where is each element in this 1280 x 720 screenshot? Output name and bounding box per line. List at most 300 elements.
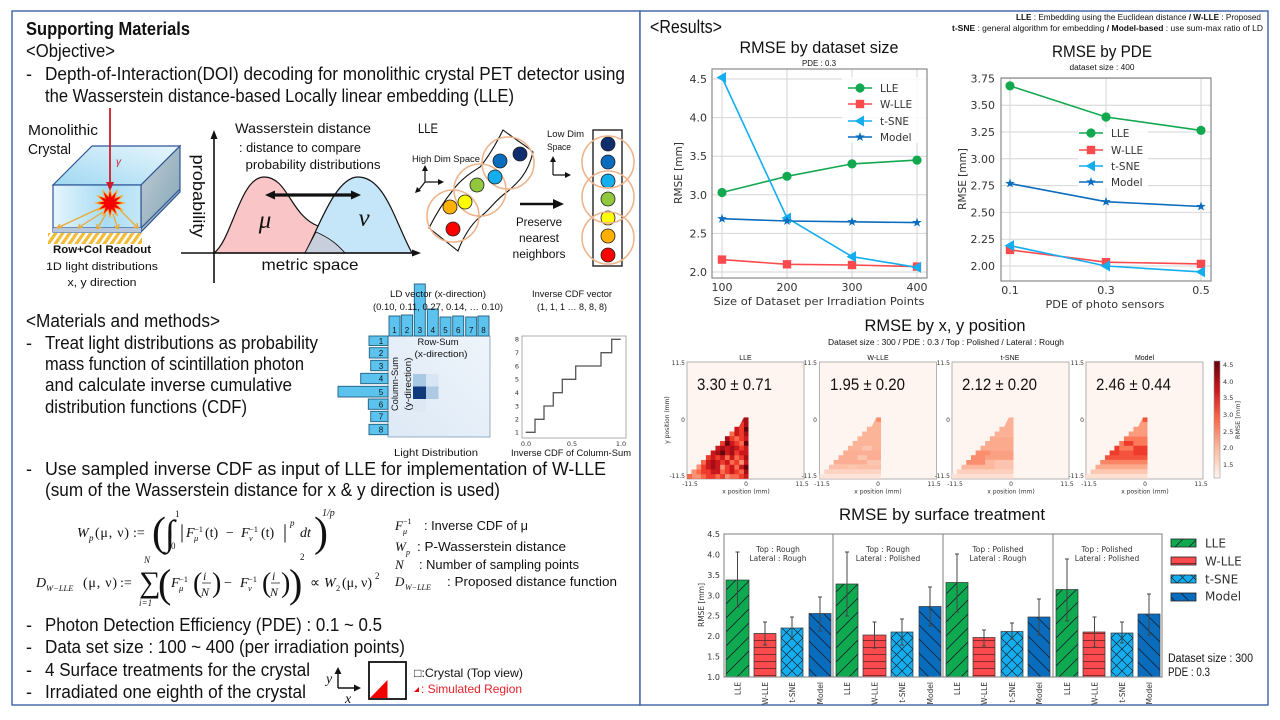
chart: RMSE by PDE: 0.5 (1192, 284, 1210, 297)
diagram: Wasserstein distance: probability distributions (246, 158, 380, 172)
chart: light distribution matrix with row and column sums: 1 (379, 337, 384, 346)
formula: proposed W-LLE distance: − (224, 576, 232, 591)
chart: inverse CDF step plot: 0.5 (567, 440, 577, 448)
chart: RMSE by PDE: 2.25 (970, 233, 995, 246)
text block: sampled inverse CDF (26, 459, 606, 500)
chart: RMSE by surface treatment: W-LLE (870, 682, 880, 705)
text block: formula notation: : Proposed distance function (447, 574, 617, 589)
text block: probability mass function: mass function of scintillation photon (45, 354, 304, 374)
chart: RMSE by dataset size: W-LLE (880, 99, 912, 111)
heatmap: t-SNE: 11.5 (1060, 481, 1074, 488)
chart: RMSE by surface treatment: 4.5 (707, 530, 720, 539)
formula: proposed W-LLE distance: ) (289, 561, 302, 606)
heatmap: t-SNE: t-SNE (1001, 355, 1020, 362)
heatmap: W-LLE: 0 (813, 417, 817, 424)
chart: light distribution matrix with row and column sums: 2 (405, 326, 410, 335)
chart: RMSE by dataset size: 200 (776, 281, 798, 294)
formula: proposed W-LLE distance: F (170, 576, 180, 591)
formula: proposed W-LLE distance: ) (212, 568, 221, 599)
chart: RMSE by PDE: 2.50 (970, 206, 995, 219)
formula: p-Wasserstein distance: ∫ (163, 513, 177, 555)
heading: RMSE by x, y position (828, 317, 1064, 347)
colorbar: RMSE scale: RMSE [mm] (1234, 401, 1242, 439)
chart: RMSE by PDE: dataset size : 400 (1070, 63, 1135, 72)
chart: RMSE by PDE: PDE of photo sensors (1046, 299, 1164, 311)
text block: method legend notes: LLE : Embedding using the Euclidean distance / W-LLE : Proposed (1016, 12, 1261, 22)
chart: inverse CDF step plot: 1 (515, 429, 519, 437)
chart: RMSE by surface treatment: 4.0 (707, 550, 720, 559)
text block: experiment parameters: - (26, 660, 32, 680)
text block: formula notation: N (394, 557, 405, 572)
formula: proposed W-LLE distance (35, 552, 380, 608)
chart: light distribution matrix with row and column sums: 4 (379, 374, 384, 384)
text block: formula notation: W (395, 539, 407, 554)
heatmap: LLE: y position (mm) (664, 396, 671, 444)
formula: proposed W-LLE distance: N (143, 555, 151, 565)
diagram: LLE embedding: nearest (519, 233, 560, 245)
text block: formula notation: F (394, 518, 404, 533)
heatmap: Model (1068, 355, 1208, 496)
formula: p-Wasserstein distance: (t) (261, 526, 275, 541)
heatmap: LLE: 0 (681, 417, 685, 424)
heatmap: LLE: 3.30 ± 0.71 (697, 375, 772, 394)
heatmap: LLE: LLE (739, 355, 752, 362)
text block: formula notation: W−LLE (405, 583, 431, 592)
chart: RMSE by surface treatment: 3.0 (707, 591, 720, 600)
text block: experiment parameters (26, 615, 405, 702)
diagram: monolithic crystal: γ (116, 157, 122, 168)
chart: RMSE by surface treatment: Lateral : Polished (856, 554, 920, 563)
heatmap: Model: Model (1135, 355, 1154, 362)
heading: materials and methods: <Materials and methods> (26, 311, 220, 331)
formula: proposed W-LLE distance: ( (158, 561, 171, 606)
heatmap: Model: 11.5 (1071, 360, 1084, 367)
text block: formula notation: p (405, 548, 410, 557)
chart: RMSE by PDE: 3.00 (970, 153, 995, 166)
chart: RMSE by surface treatment: 1.0 (707, 673, 720, 682)
heatmap: t-SNE: 2.12 ± 0.20 (962, 375, 1037, 394)
chart: inverse CDF step plot: 3 (515, 402, 519, 410)
chart: RMSE by surface treatment (697, 506, 1162, 705)
heatmap: t-SNE: 0 (946, 417, 950, 424)
formula: proposed W-LLE distance: (μ, ν) (83, 576, 117, 591)
chart: RMSE by surface treatment: Lateral : Rough (969, 554, 1027, 563)
heading: RMSE by x, y position: Dataset size : 300 / PDE : 0.3 / Top : Polished / Lateral : Rough (828, 338, 1064, 347)
heatmap: W-LLE: 11.5 (804, 360, 817, 367)
formula: p-Wasserstein distance: (t) (205, 526, 219, 541)
text block: formula notation (394, 517, 617, 592)
chart: light distribution matrix with row and column sums: 7 (469, 326, 474, 335)
chart: inverse CDF step plot: 5 (515, 376, 519, 384)
chart: inverse CDF step plot: 7 (515, 349, 519, 357)
text block: formula notation: μ (402, 527, 407, 536)
chart: RMSE by PDE: 3.50 (970, 99, 995, 112)
formula: proposed W-LLE distance: ( (193, 568, 202, 599)
heatmap: W-LLE (801, 355, 941, 496)
formula: p-Wasserstein distance: ) (314, 510, 328, 556)
formula: proposed W-LLE distance: W−LLE (46, 583, 74, 593)
chart: RMSE by surface treatment: 2.0 (707, 632, 720, 641)
heatmap: t-SNE: 11.5 (937, 360, 950, 367)
chart: light distribution matrix with row and column sums: 6 (379, 400, 384, 410)
chart: RMSE by PDE: RMSE [mm] (957, 148, 969, 210)
diagram: Wasserstein distance: : distance to compare (239, 141, 361, 155)
heatmap: Model: 0 (1143, 481, 1147, 488)
colorbar: RMSE scale: 4.0 (1223, 378, 1233, 386)
chart: RMSE by surface treatment: t-SNE (898, 682, 907, 703)
heatmap: t-SNE: -11.5 (934, 473, 950, 480)
diagram: monolithic crystal: Crystal (28, 142, 71, 158)
formula: p-Wasserstein distance: ν (249, 533, 253, 543)
chart: RMSE by dataset size: RMSE by dataset size (740, 39, 898, 57)
formula: p-Wasserstein distance: dt (300, 526, 312, 541)
diagram: monolithic crystal (28, 108, 180, 289)
text block: experiment parameters: - (26, 682, 32, 702)
legend: surface treatment methods: W-LLE (1205, 554, 1242, 568)
chart: RMSE by PDE: Model (1111, 177, 1143, 189)
text block: probability mass function: distribution functions (CDF) (45, 397, 247, 417)
chart: RMSE by surface treatment: Model (1145, 682, 1154, 705)
chart: light distribution matrix with row and column sums: Column-Sum (390, 357, 401, 411)
formula: p-Wasserstein distance: := (133, 526, 145, 541)
chart: inverse CDF step plot: (1, 1, 1 … 8, 8, 8) (537, 302, 607, 313)
text block: experiment parameters: - (26, 637, 32, 657)
diagram: Wasserstein distance: metric space (262, 257, 359, 274)
formula: p-Wasserstein distance: −1 (194, 524, 203, 534)
heatmap: W-LLE: -11.5 (801, 473, 817, 480)
chart: RMSE by surface treatment: LLE (734, 682, 742, 695)
text block: sampled inverse CDF: (sum of the Wasserstein distance for x & y direction is used) (45, 480, 500, 500)
chart: RMSE by surface treatment: Lateral : Rough (749, 554, 807, 563)
chart: light distribution matrix with row and column sums: 3 (418, 326, 423, 335)
chart: inverse CDF step plot: 2 (515, 416, 519, 424)
formula: proposed W-LLE distance: := (120, 576, 132, 591)
chart: inverse CDF step plot: 6 (515, 362, 519, 370)
chart: light distribution matrix with row and column sums: 3 (379, 362, 384, 371)
diagram: LLE embedding: High Dim Space (412, 154, 480, 164)
heatmap: LLE: x position (mm) (722, 488, 770, 496)
chart: RMSE by PDE: 0.1 (1001, 284, 1019, 297)
chart: light distribution matrix with row and column sums: 2 (379, 349, 384, 358)
formula: proposed W-LLE distance: 2 (375, 571, 380, 581)
chart: RMSE by surface treatment: W-LLE (980, 682, 989, 705)
colorbar: RMSE scale: 2.5 (1223, 428, 1233, 436)
chart: RMSE by surface treatment: 3.5 (707, 571, 720, 580)
chart: RMSE by surface treatment: Model (926, 682, 935, 705)
diagram: simulated region of crystal: x (344, 692, 352, 707)
heatmap: Model: -11.5 (1081, 481, 1097, 488)
chart: RMSE by surface treatment: t-SNE (1118, 682, 1127, 703)
formula: p-Wasserstein distance: F (185, 526, 195, 541)
chart: RMSE by PDE: W-LLE (1111, 145, 1143, 157)
chart: RMSE by surface treatment: RMSE [mm] (697, 583, 706, 627)
heatmap: LLE: 11.5 (672, 360, 685, 367)
diagram: Wasserstein distance: probability (189, 154, 208, 238)
chart: RMSE by surface treatment: Lateral : Polished (1075, 554, 1139, 563)
text block: experiment parameters: Photon Detection Efficiency (PDE) : 0.1 ~ 0.5 (45, 615, 382, 635)
chart: inverse CDF step plot: 8 (515, 336, 519, 344)
colorbar: RMSE scale: 3.0 (1223, 411, 1233, 419)
diagram: LLE embedding: Space (547, 142, 571, 152)
heatmap: Model: x position (mm) (1121, 488, 1169, 496)
heatmap: Model: -11.5 (1068, 473, 1084, 480)
colorbar: RMSE scale: 4.5 (1223, 361, 1233, 369)
chart: inverse CDF step plot: 4 (515, 389, 519, 397)
heatmap: LLE (664, 355, 809, 496)
diagram: monolithic crystal: Monolithic (28, 123, 98, 139)
chart: RMSE by surface treatment: LLE (1063, 682, 1072, 695)
heading: objective: <Objective> (26, 41, 115, 61)
heatmap: W-LLE: W-LLE (867, 355, 889, 362)
legend: surface treatment methods: LLE (1205, 536, 1226, 550)
diagram: LLE embedding: Preserve (516, 217, 562, 229)
formula: p-Wasserstein distance: 1 (175, 509, 180, 519)
heatmap: W-LLE: 11.5 (927, 481, 941, 488)
text block: surface chart settings: Dataset size : 300 (1168, 653, 1253, 665)
panel: supporting materials (left) (12, 11, 640, 707)
formula: proposed W-LLE distance: μ (178, 583, 183, 593)
colorbar: RMSE scale (1214, 361, 1242, 478)
chart: light distribution matrix with row and column sums (338, 284, 503, 459)
title: supporting materials: Supporting Materials (26, 19, 190, 39)
chart: RMSE by PDE: t-SNE (1111, 161, 1140, 173)
text block: formula notation: : Number of sampling points (419, 557, 579, 572)
formula: proposed W-LLE distance: F (239, 576, 249, 591)
text block: objective description: the Wasserstein distance-based Locally linear embedding (LLE) (45, 86, 514, 106)
text block: objective description (26, 64, 625, 106)
legend: surface treatment methods (1171, 536, 1242, 604)
diagram: monolithic crystal: Row+Col Readout (53, 244, 151, 256)
chart: light distribution matrix with row and column sums: 8 (379, 426, 384, 434)
heatmap: LLE: 11.5 (795, 481, 809, 488)
formula: proposed W-LLE distance: (μ, ν) (342, 576, 372, 591)
formula: p-Wasserstein distance: 0 (171, 541, 176, 551)
diagram: simulated region of crystal: : Simulated Region (421, 682, 522, 696)
chart: RMSE by surface treatment: 1.5 (707, 653, 720, 662)
chart: inverse CDF step plot: 1.0 (616, 440, 626, 448)
chart: RMSE by PDE (957, 43, 1211, 311)
heatmap: t-SNE: 0 (1009, 481, 1013, 488)
chart: RMSE by dataset size: Size of Dataset per Irradiation Points (714, 296, 924, 308)
chart: light distribution matrix with row and column sums: 1 (392, 326, 397, 335)
chart: RMSE by dataset size: 4.0 (690, 112, 707, 125)
chart: RMSE by surface treatment: LLE (843, 682, 852, 695)
formula: proposed W-LLE distance: −1 (248, 574, 257, 584)
heatmap: LLE: -11.5 (669, 473, 685, 480)
diagram: LLE embedding: Low Dim (547, 129, 584, 139)
chart: light distribution matrix with row and column sums: 7 (379, 412, 384, 422)
chart: RMSE by surface treatment: Top : Polished (1080, 545, 1133, 554)
chart: inverse CDF step plot (511, 289, 631, 459)
diagram: Wasserstein distance: Wasserstein distance (235, 120, 371, 136)
formula: p-Wasserstein distance: F (240, 526, 250, 541)
chart: RMSE by surface treatment: RMSE by surface treatment (839, 506, 1045, 524)
text block: formula notation: D (394, 574, 405, 589)
legend: surface treatment methods: t-SNE (1205, 572, 1238, 586)
heatmap: W-LLE: 1.95 ± 0.20 (830, 375, 905, 394)
text block: formula notation: −1 (403, 517, 412, 526)
diagram: LLE embedding: LLE (418, 121, 438, 136)
chart: RMSE by dataset size: 2.5 (690, 227, 707, 240)
formula: p-Wasserstein distance (77, 508, 335, 556)
formula: p-Wasserstein distance: − (226, 526, 234, 541)
chart: inverse CDF step plot: 0.0 (521, 440, 531, 448)
diagram: simulated region of crystal: □:Crystal (Top view) (414, 666, 523, 680)
formula: proposed W-LLE distance: 2 (300, 552, 304, 562)
formula: proposed W-LLE distance: i (203, 569, 206, 583)
diagram: monolithic crystal: x, y direction (68, 277, 136, 289)
chart: RMSE by PDE: 3.25 (970, 126, 995, 139)
chart: RMSE by PDE: 2.75 (970, 180, 995, 193)
text block: method legend notes: t-SNE : general algorithm for embedding / Model-based : use sum-max ratio of LD (952, 23, 1263, 33)
diagram: Wasserstein distance: μ (258, 207, 271, 234)
heatmap: LLE: -11.5 (682, 481, 698, 488)
chart: light distribution matrix with row and column sums: (y-direction) (403, 358, 414, 410)
diagram: Wasserstein distance: ν (358, 205, 370, 232)
diagram: simulated region of crystal (324, 662, 523, 707)
text block: probability mass function: Treat light distributions as probability (45, 333, 318, 353)
chart: RMSE by surface treatment: Model (1035, 682, 1044, 705)
chart: light distribution matrix with row and column sums: 5 (379, 388, 384, 397)
heatmap: W-LLE: x position (mm) (854, 488, 902, 496)
chart: RMSE by dataset size: 3.0 (690, 189, 707, 202)
chart: light distribution matrix with row and column sums: 5 (443, 326, 448, 335)
legend: surface treatment methods: Model (1205, 590, 1241, 604)
chart: inverse CDF step plot: Inverse CDF of Column-Sum (511, 448, 631, 459)
chart: RMSE by dataset size: 300 (842, 281, 862, 294)
chart: RMSE by surface treatment: Top : Rough (865, 545, 910, 554)
formula: p-Wasserstein distance: p (88, 533, 94, 543)
chart: light distribution matrix with row and column sums: 8 (481, 326, 486, 335)
formula: p-Wasserstein distance: μ (193, 533, 198, 543)
diagram: simulated region of crystal: y (324, 672, 333, 687)
formula: proposed W-LLE distance: W (324, 576, 337, 591)
chart: RMSE by surface treatment: Top : Polished (972, 545, 1024, 554)
formula: proposed W-LLE distance: 2 (336, 583, 340, 593)
chart: RMSE by dataset size: 4.5 (690, 73, 707, 86)
heatmap: Model: 0 (1080, 417, 1084, 424)
chart: RMSE by surface treatment: t-SNE (1008, 682, 1017, 703)
heatmap: Model: 11.5 (1194, 481, 1208, 488)
text block: objective description: Depth-of-Interaction(DOI) decoding for monolithic crystal PET detector using (45, 64, 625, 84)
chart: light distribution matrix with row and column sums: 4 (431, 326, 436, 335)
formula: proposed W-LLE distance: i=1 (139, 598, 152, 608)
chart: RMSE by surface treatment: Model (816, 682, 825, 705)
chart: RMSE by dataset size: 2.0 (690, 266, 707, 279)
formula: proposed W-LLE distance: −1 (179, 574, 188, 584)
colorbar: RMSE scale: 1.5 (1223, 461, 1233, 469)
chart: light distribution matrix with row and column sums: 6 (456, 326, 461, 335)
formula: p-Wasserstein distance: (μ, ν) (95, 526, 129, 541)
formula: p-Wasserstein distance: ( (152, 510, 166, 556)
chart: light distribution matrix with row and column sums: (x-direction) (414, 349, 468, 360)
text block: probability mass function: - (26, 333, 32, 353)
chart: RMSE by surface treatment: 2.5 (707, 612, 720, 621)
text block: experiment parameters: 4 Surface treatments for the crystal (45, 660, 310, 680)
chart: light distribution matrix with row and column sums: LD vector (x-direction) (390, 289, 486, 300)
formula: proposed W-LLE distance: ( (262, 568, 271, 599)
chart: RMSE by dataset size (673, 39, 928, 308)
chart: RMSE by surface treatment: t-SNE (788, 682, 797, 703)
text block: formula notation: : P-Wasserstein distance (417, 539, 566, 554)
chart: light distribution matrix with row and column sums: (0.10, 0.11, 0.27, 0.14, … 0.10) (373, 302, 503, 313)
heatmap: t-SNE: -11.5 (947, 481, 963, 488)
diagram: Wasserstein distance (181, 120, 421, 283)
chart: RMSE by PDE: 0.3 (1097, 284, 1115, 297)
formula: p-Wasserstein distance: | (180, 521, 184, 543)
chart: RMSE by dataset size: LLE (880, 83, 898, 95)
text block: experiment parameters: Irradiated one eighth of the crystal (45, 682, 306, 702)
text block: sampled inverse CDF: Use sampled inverse CDF as input of LLE for implementation of W-LLE (45, 459, 606, 479)
chart: RMSE by surface treatment: LLE (953, 682, 962, 695)
formula: proposed W-LLE distance: N (269, 585, 279, 599)
chart: RMSE by PDE: 2.00 (970, 260, 995, 273)
text block: surface chart settings (1168, 653, 1253, 679)
diagram: monolithic crystal: 1D light distributions (46, 261, 159, 273)
diagram: LLE embedding: neighbors (512, 249, 566, 261)
chart: RMSE by surface treatment: W-LLE (1090, 682, 1100, 705)
text block: experiment parameters: Data set size : 100 ~ 400 (per irradiation points) (45, 637, 405, 657)
heatmap: LLE: 0 (744, 481, 748, 488)
panel: results (right) (640, 11, 1268, 705)
chart: RMSE by dataset size: 3.5 (690, 150, 707, 163)
chart: RMSE by PDE: LLE (1111, 128, 1129, 140)
formula: proposed W-LLE distance: ) (281, 568, 290, 599)
heatmap: t-SNE (934, 355, 1074, 496)
chart: RMSE by dataset size: RMSE [mm] (673, 142, 685, 204)
chart: RMSE by surface treatment: W-LLE (761, 682, 770, 705)
formula: p-Wasserstein distance: −1 (249, 524, 258, 534)
chart: light distribution matrix with row and column sums: Row-Sum (418, 337, 459, 348)
text block: surface chart settings: PDE : 0.3 (1168, 667, 1210, 679)
formula: proposed W-LLE distance: i (272, 569, 275, 583)
heatmap: W-LLE: -11.5 (814, 481, 830, 488)
chart: RMSE by dataset size: PDE : 0.3 (802, 59, 837, 68)
text block: probability mass function: and calculate inverse cumulative (45, 375, 292, 395)
heatmap: Model: 2.46 ± 0.44 (1096, 375, 1171, 394)
text block: sampled inverse CDF: - (26, 459, 32, 479)
chart: RMSE by PDE: 3.75 (970, 72, 995, 85)
heatmap: W-LLE: 0 (876, 481, 880, 488)
formula: proposed W-LLE distance: D (35, 576, 46, 591)
formula: p-Wasserstein distance: W (77, 526, 90, 541)
chart: light distribution matrix with row and column sums: Light Distribution (394, 448, 478, 459)
diagram: LLE embedding (412, 121, 634, 266)
chart: RMSE by PDE: RMSE by PDE (1052, 43, 1152, 61)
chart: RMSE by surface treatment: Top : Rough (755, 545, 800, 554)
chart: RMSE by dataset size: t-SNE (880, 116, 909, 128)
chart: RMSE by dataset size: 400 (906, 281, 928, 294)
text block: formula notation: : Inverse CDF of μ (424, 518, 528, 533)
formula: p-Wasserstein distance: p (289, 518, 295, 528)
colorbar: RMSE scale: 3.5 (1223, 394, 1233, 402)
formula: proposed W-LLE distance: ∑ (139, 566, 160, 599)
heatmap: t-SNE: x position (mm) (987, 488, 1035, 496)
chart: RMSE by dataset size: Model (880, 132, 912, 144)
text block: probability mass function (26, 333, 318, 417)
formula: proposed W-LLE distance: N (200, 585, 210, 599)
formula: proposed W-LLE distance: ∝ (310, 576, 320, 591)
text block: method legend notes (952, 12, 1263, 33)
text block: objective description: - (26, 64, 32, 84)
formula: proposed W-LLE distance: ν (248, 583, 252, 593)
chart: inverse CDF step plot: Inverse CDF vector (532, 289, 612, 300)
chart: RMSE by dataset size: 100 (712, 281, 732, 294)
formula: p-Wasserstein distance: | (283, 521, 287, 543)
heading: RMSE by x, y position: RMSE by x, y position (864, 317, 1026, 335)
colorbar: RMSE scale: 2.0 (1223, 444, 1233, 452)
text block: experiment parameters: - (26, 615, 32, 635)
